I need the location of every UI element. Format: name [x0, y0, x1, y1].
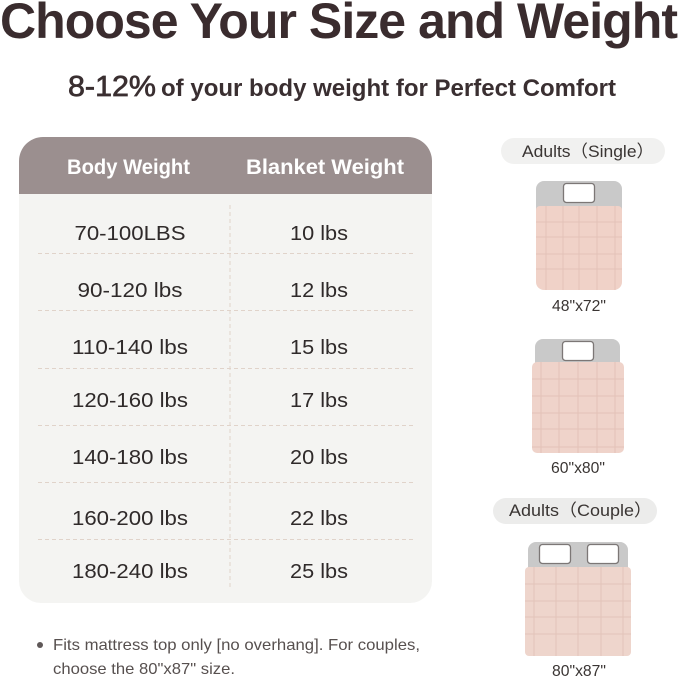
rows: 180-240 lbs — [72, 561, 188, 583]
subtitle: 8-12% — [68, 71, 156, 103]
footnote: Fits mattress top only [no overhang]. For couples, — [53, 637, 420, 654]
footnote — [37, 637, 420, 678]
rows: 160-200 lbs — [72, 508, 188, 530]
icon: couple bed 80x87 — [525, 542, 631, 656]
subtitle: of your body weight for Perfect Comfort — [161, 75, 616, 102]
rows — [72, 223, 348, 583]
label: adults couple — [493, 498, 657, 524]
rows: 140-180 lbs — [72, 447, 188, 469]
bullet — [37, 642, 43, 648]
caption: 48x72: 48"x72" — [552, 298, 606, 315]
icon: single bed 48x72 — [536, 181, 622, 290]
rows: 90-120 lbs — [78, 280, 182, 302]
rows: 12 lbs — [290, 280, 348, 302]
label: adults couple: Adults（Couple） — [509, 501, 652, 520]
label: adults single — [501, 138, 665, 164]
rows: 70-100LBS — [74, 223, 186, 245]
rows: 110-140 lbs — [72, 337, 188, 359]
icon: full bed 60x80 — [532, 339, 624, 453]
caption: 60x80: 60"x80" — [551, 460, 605, 477]
rows: 10 lbs — [290, 223, 348, 245]
panel: weight table — [19, 137, 432, 603]
label: adults single: Adults（Single） — [522, 142, 654, 161]
table header — [19, 137, 432, 194]
rows: 17 lbs — [290, 390, 348, 412]
rows: 25 lbs — [290, 561, 348, 583]
header: body weight: Body Weight — [67, 156, 190, 179]
rows: 22 lbs — [290, 508, 348, 530]
table body — [19, 190, 432, 603]
rows: 120-160 lbs — [72, 390, 188, 412]
rows: 15 lbs — [290, 337, 348, 359]
footnote: choose the 80"x87" size. — [53, 661, 235, 678]
rows: 20 lbs — [290, 447, 348, 469]
header: blanket weight: Blanket Weight — [246, 156, 404, 179]
